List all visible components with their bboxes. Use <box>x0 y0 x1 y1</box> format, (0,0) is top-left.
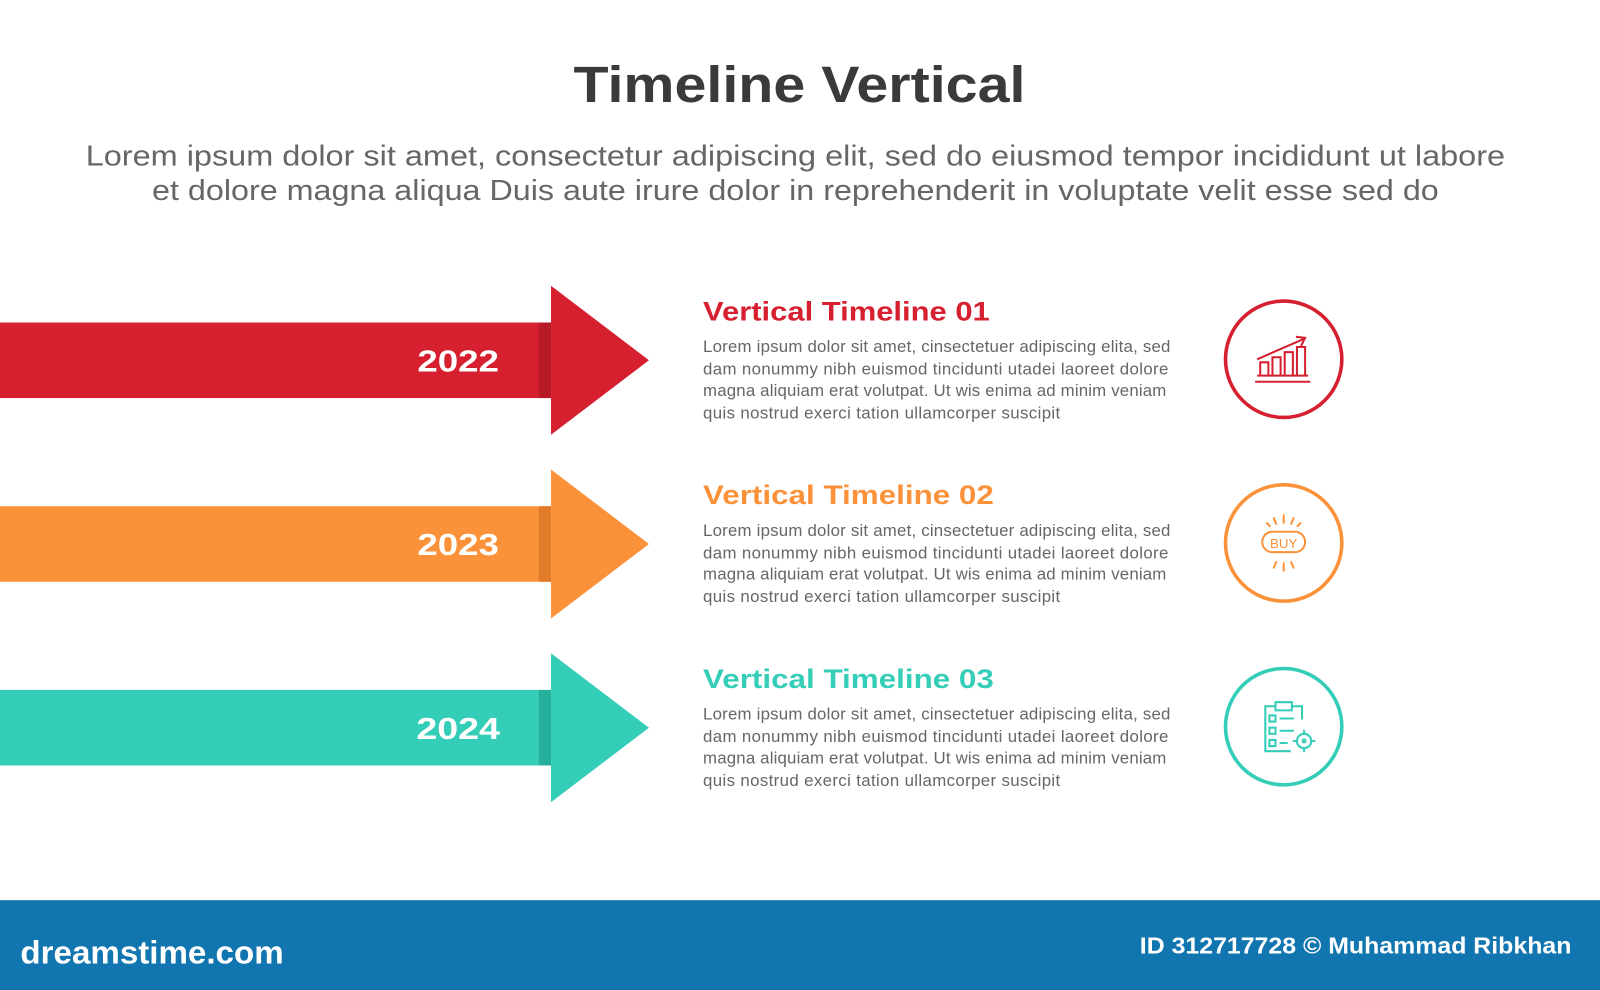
text block 01 <box>703 296 1170 422</box>
arrow: 2023 <box>0 469 649 618</box>
text block 02 <box>703 480 1170 606</box>
text block 02: magna aliquiam erat volutpat. Ut wis enima ad minim veniam <box>703 565 1166 584</box>
text block 02: quis nostrud exerci tation ullamcorper suscipit <box>703 587 1061 606</box>
text block 01: Vertical Timeline 01 <box>703 296 990 326</box>
footer <box>0 900 1600 990</box>
text block 03: Vertical Timeline 03 <box>703 664 994 694</box>
icon: chart <box>1226 301 1342 417</box>
arrow: 2023: 2023 <box>417 528 499 562</box>
arrow: 2022 <box>0 286 649 435</box>
icon: clipboard <box>1226 669 1342 785</box>
text block 03 <box>703 664 1170 790</box>
arrow: 2022: 2022 <box>417 345 499 379</box>
text block 01: magna aliquiam erat volutpat. Ut wis enima ad minim veniam <box>703 381 1166 400</box>
text block 01: Lorem ipsum dolor sit amet, cinsectetuer adipiscing elita, sed <box>703 337 1170 356</box>
text block 03: quis nostrud exerci tation ullamcorper suscipit <box>703 771 1061 790</box>
title: Timeline Vertical <box>573 56 1026 113</box>
text block 03: magna aliquiam erat volutpat. Ut wis enima ad minim veniam <box>703 748 1166 767</box>
text block 03: dam nonummy nibh euismod tincidunti utadei laoreet dolore <box>703 727 1168 746</box>
text block 02: Lorem ipsum dolor sit amet, cinsectetuer adipiscing elita, sed <box>703 521 1170 540</box>
text block 03: Lorem ipsum dolor sit amet, cinsectetuer adipiscing elita, sed <box>703 705 1170 724</box>
text block 02: Vertical Timeline 02 <box>703 480 994 510</box>
icon: buy <box>1226 485 1342 601</box>
text block 01: quis nostrud exerci tation ullamcorper suscipit <box>703 403 1061 422</box>
subtitle <box>86 140 1505 207</box>
arrow: 2024 <box>0 653 649 802</box>
text block 02: dam nonummy nibh euismod tincidunti utadei laoreet dolore <box>703 543 1168 562</box>
subtitle: et dolore magna aliqua Duis aute irure dolor in reprehenderit in voluptate velit esse sed do <box>152 175 1439 207</box>
subtitle: Lorem ipsum dolor sit amet, consectetur adipiscing elit, sed do eiusmod tempor incididunt ut labore <box>86 140 1505 172</box>
arrow: 2024: 2024 <box>416 712 500 746</box>
text block 01: dam nonummy nibh euismod tincidunti utadei laoreet dolore <box>703 360 1168 379</box>
icon: buy: BUY <box>1270 536 1297 551</box>
footer: ID 312717728 © Muhammad Ribkhan <box>1140 932 1571 958</box>
footer: dreamstime.com <box>20 933 284 970</box>
